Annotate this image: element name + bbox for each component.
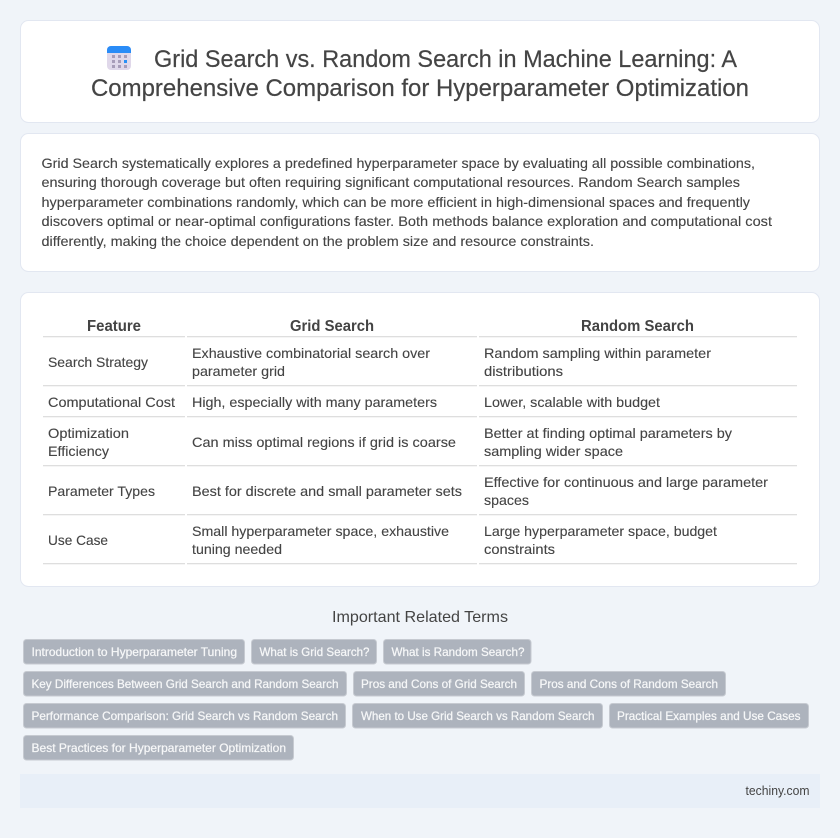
tag (24, 672, 346, 696)
row: use case: Small hyperparameter space, exhaustive (192, 523, 449, 539)
row: parameter types: Best for discrete and small parameter sets (192, 483, 462, 499)
intro paragraph: discovers optimal or near-optimal configurations faster. Both methods balance exploration and computational cost (42, 213, 772, 229)
row: search strategy: Search Strategy (48, 354, 148, 370)
tag (384, 640, 531, 664)
row: computational cost: Lower, scalable with budget (484, 394, 660, 410)
row: optimization efficiency (48, 425, 732, 459)
tag: Introduction to Hyperparameter Tuning (32, 645, 237, 659)
tag (252, 640, 376, 664)
row: computational cost: Computational Cost (48, 394, 175, 410)
row: use case: constraints (484, 541, 555, 557)
table header (87, 318, 694, 335)
intro paragraph: Grid Search systematically explores a predefined hyperparameter space by evaluating all possible combinations, (42, 155, 755, 171)
tag: What is Grid Search? (260, 645, 370, 659)
tag (24, 736, 294, 760)
row: parameter types: Parameter Types (48, 483, 155, 499)
tag: Key Differences Between Grid Search and Random Search (32, 677, 338, 691)
tag: What is Random Search? (392, 645, 525, 659)
tag: Performance Comparison: Grid Search vs Random Search (32, 709, 338, 723)
row: parameter types: Effective for continuous and large parameter (484, 474, 768, 490)
row: optimization efficiency: Can miss optimal regions if grid is coarse (192, 434, 456, 450)
row: search strategy: Exhaustive combinatorial search over (192, 345, 430, 361)
intro paragraph: hyperparameter combinations randomly, which can be more efficient in high-dimensional spaces and frequently (42, 194, 750, 210)
icon: calendar grid (107, 46, 131, 70)
panel: header (20, 20, 820, 122)
tag: Pros and Cons of Random Search (540, 677, 718, 691)
tag (352, 704, 602, 728)
table header: Random Search (581, 318, 694, 335)
row: search strategy (48, 345, 711, 379)
tag (354, 672, 524, 696)
row: computational cost: High, especially with many parameters (192, 394, 437, 410)
title (91, 46, 749, 102)
table header: Grid Search (290, 318, 374, 335)
row: optimization efficiency: sampling wider space (484, 443, 623, 459)
row: optimization efficiency: Optimization (48, 425, 129, 441)
row: search strategy: Random sampling within parameter (484, 345, 711, 361)
row: search strategy: distributions (484, 363, 563, 379)
tag (24, 640, 244, 664)
tag (532, 672, 726, 696)
row: use case: Large hyperparameter space, budget (484, 523, 717, 539)
footer: techiny.com (746, 783, 810, 798)
intro paragraph: ensuring thorough coverage but often requiring significant computational resources. Random Search samples (42, 174, 740, 190)
panel: introduction text (20, 134, 820, 272)
table header: Feature (87, 318, 141, 335)
row: use case: tuning needed (192, 541, 282, 557)
tag: Practical Examples and Use Cases (617, 709, 800, 723)
tag (610, 704, 808, 728)
tag: Best Practices for Hyperparameter Optimization (32, 741, 286, 755)
related terms tags (24, 640, 808, 760)
tag: Pros and Cons of Grid Search (361, 677, 517, 691)
row: use case (48, 523, 717, 557)
row: optimization efficiency: Better at finding optimal parameters by (484, 425, 732, 441)
intro paragraph (42, 155, 772, 249)
row: parameter types: spaces (484, 492, 529, 508)
row: search strategy: parameter grid (192, 363, 285, 379)
tag: When to Use Grid Search vs Random Search (361, 709, 594, 723)
row: optimization efficiency: Efficiency (48, 443, 109, 459)
footer (20, 774, 820, 808)
panel: comparison table (20, 292, 820, 586)
heading: important related terms: Important Related Terms (332, 609, 508, 626)
row: use case: Use Case (48, 532, 108, 548)
title: Comprehensive Comparison for Hyperparameter Optimization (91, 75, 749, 102)
title: Grid Search vs. Random Search in Machine Learning: A (154, 46, 737, 73)
row: parameter types (48, 474, 768, 508)
tag (24, 704, 346, 728)
row: computational cost (48, 394, 660, 410)
intro paragraph: differently, making the choice dependent on the problem size and resource constraints. (42, 233, 594, 249)
